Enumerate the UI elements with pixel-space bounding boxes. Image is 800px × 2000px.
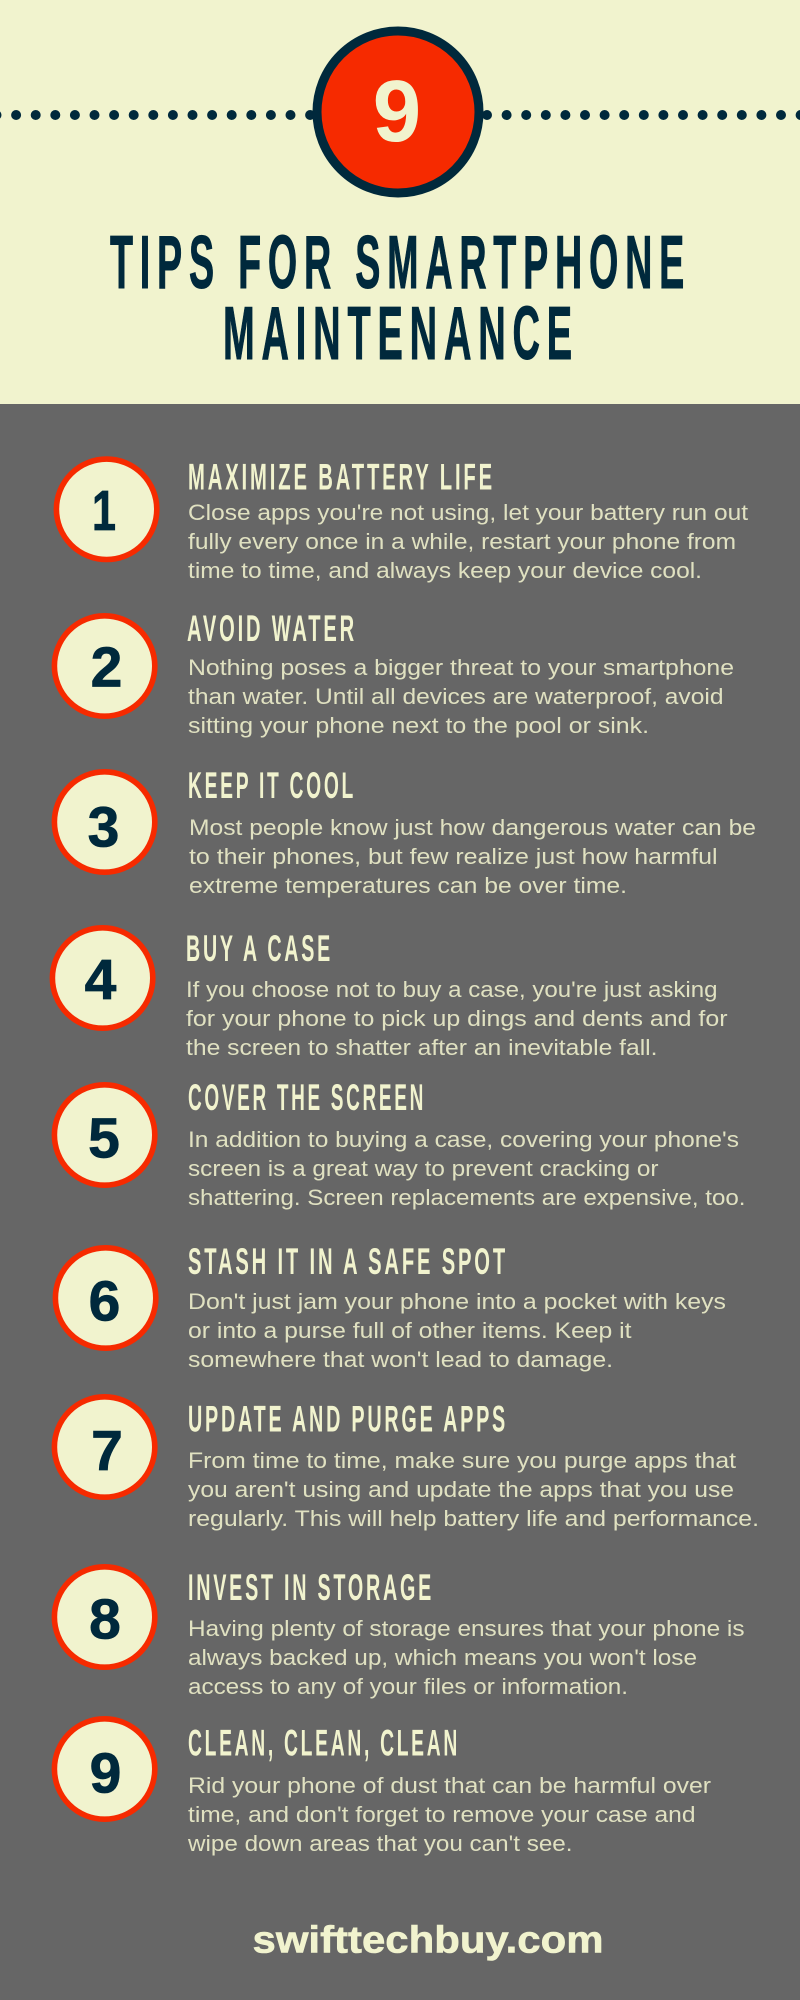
badge 6 [55,1248,156,1348]
heading 8: INVEST IN STORAGE [188,1567,434,1608]
footer url: swifttechbuy.com [252,1920,604,1962]
heading 7: UPDATE AND PURGE APPS [188,1398,508,1439]
body 8 [188,1616,744,1699]
body 6: somewhere that won't lead to damage. [188,1347,613,1372]
heading 9: CLEAN, CLEAN, CLEAN [188,1723,460,1764]
heading 1: MAXIMIZE BATTERY LIFE [188,456,495,498]
body 1 [188,500,748,583]
badge 6: 6 [89,1270,120,1334]
body 8: Having plenty of storage ensures that your phone is [188,1616,744,1641]
panel: tip 5 [54,1077,745,1210]
panel: tip 2 [54,608,734,738]
body 9: Rid your phone of dust that can be harmful over [188,1773,711,1798]
badge 5 [54,1085,155,1185]
badge 2 [54,616,155,716]
badge 8: 8 [89,1588,121,1652]
badge 1: 1 [92,479,116,543]
badge 3: 3 [88,795,119,859]
header panel [0,0,800,404]
body 7 [188,1448,759,1531]
body 5: shattering. Screen replacements are expensive, too. [188,1185,746,1210]
badge 9: 9 [90,1742,121,1806]
panel: tip 4 [52,928,727,1060]
body 4: for your phone to pick up dings and dents and for [186,1006,728,1031]
panel: tip 1 [56,456,748,583]
badge 1 [56,459,157,560]
body 5: screen is a great way to prevent cracking or [188,1156,658,1181]
badge 7 [54,1397,155,1497]
heading 5: COVER THE SCREEN [188,1077,426,1118]
title [110,220,691,375]
body 1: time to time, and always keep your device cool. [188,558,702,583]
body 1: fully every once in a while, restart your phone from [188,529,736,554]
badge 9 [54,1719,155,1819]
body 8: always backed up, which means you won't lose [188,1645,697,1670]
panel: tip 7 [54,1397,759,1531]
body 8: access to any of your files or information. [188,1674,628,1699]
body 6: Don't just jam your phone into a pocket with keys [188,1289,726,1314]
badge 5: 5 [88,1107,120,1171]
heading 3: KEEP IT COOL [188,765,356,806]
panel: tip 3 [54,765,756,898]
heading 6: STASH IT IN A SAFE SPOT [188,1241,508,1282]
badge 2: 2 [91,636,122,700]
body 3: extreme temperatures can be over time. [189,873,627,898]
body 4: the screen to shatter after an inevitable fall. [186,1035,658,1060]
body 6: or into a purse full of other items. Keep it [188,1318,632,1343]
body 9 [187,1773,711,1856]
badge 4 [52,928,153,1028]
panel: tip 9 [54,1719,711,1856]
body 2: Nothing poses a bigger threat to your smartphone [188,655,734,680]
badge 3 [54,772,155,872]
panel: tip 8 [54,1567,744,1699]
body 3 [189,815,756,898]
body 4 [186,977,728,1060]
big number badge [317,31,479,193]
dotted line right [487,110,800,120]
dotted line left [0,110,312,120]
body 7: you aren't using and update the apps that you use [188,1477,734,1502]
heading 2: AVOID WATER [187,608,357,649]
heading 4: BUY A CASE [186,928,333,969]
body 2 [188,655,734,738]
body 5 [188,1127,746,1210]
body 2: sitting your phone next to the pool or sink. [188,713,649,738]
body 5: In addition to buying a case, covering your phone's [188,1127,739,1152]
body 6 [188,1289,726,1372]
big number badge: 9 [373,63,421,160]
badge 8 [54,1567,155,1667]
body 1: Close apps you're not using, let your battery run out [188,500,748,525]
panel: tips background [0,404,800,2000]
body 2: than water. Until all devices are waterproof, avoid [188,684,724,709]
badge 7: 7 [91,1419,123,1483]
body 9: wipe down areas that you can't see. [187,1831,572,1856]
body 7: regularly. This will help battery life and performance. [188,1506,759,1531]
panel: tip 6 [55,1241,726,1372]
body 3: Most people know just how dangerous water can be [189,815,756,840]
body 7: From time to time, make sure you purge apps that [188,1448,736,1473]
body 3: to their phones, but few realize just how harmful [189,844,718,869]
badge 4: 4 [85,948,117,1012]
body 9: time, and don't forget to remove your case and [188,1802,696,1827]
body 4: If you choose not to buy a case, you're just asking [186,977,718,1002]
